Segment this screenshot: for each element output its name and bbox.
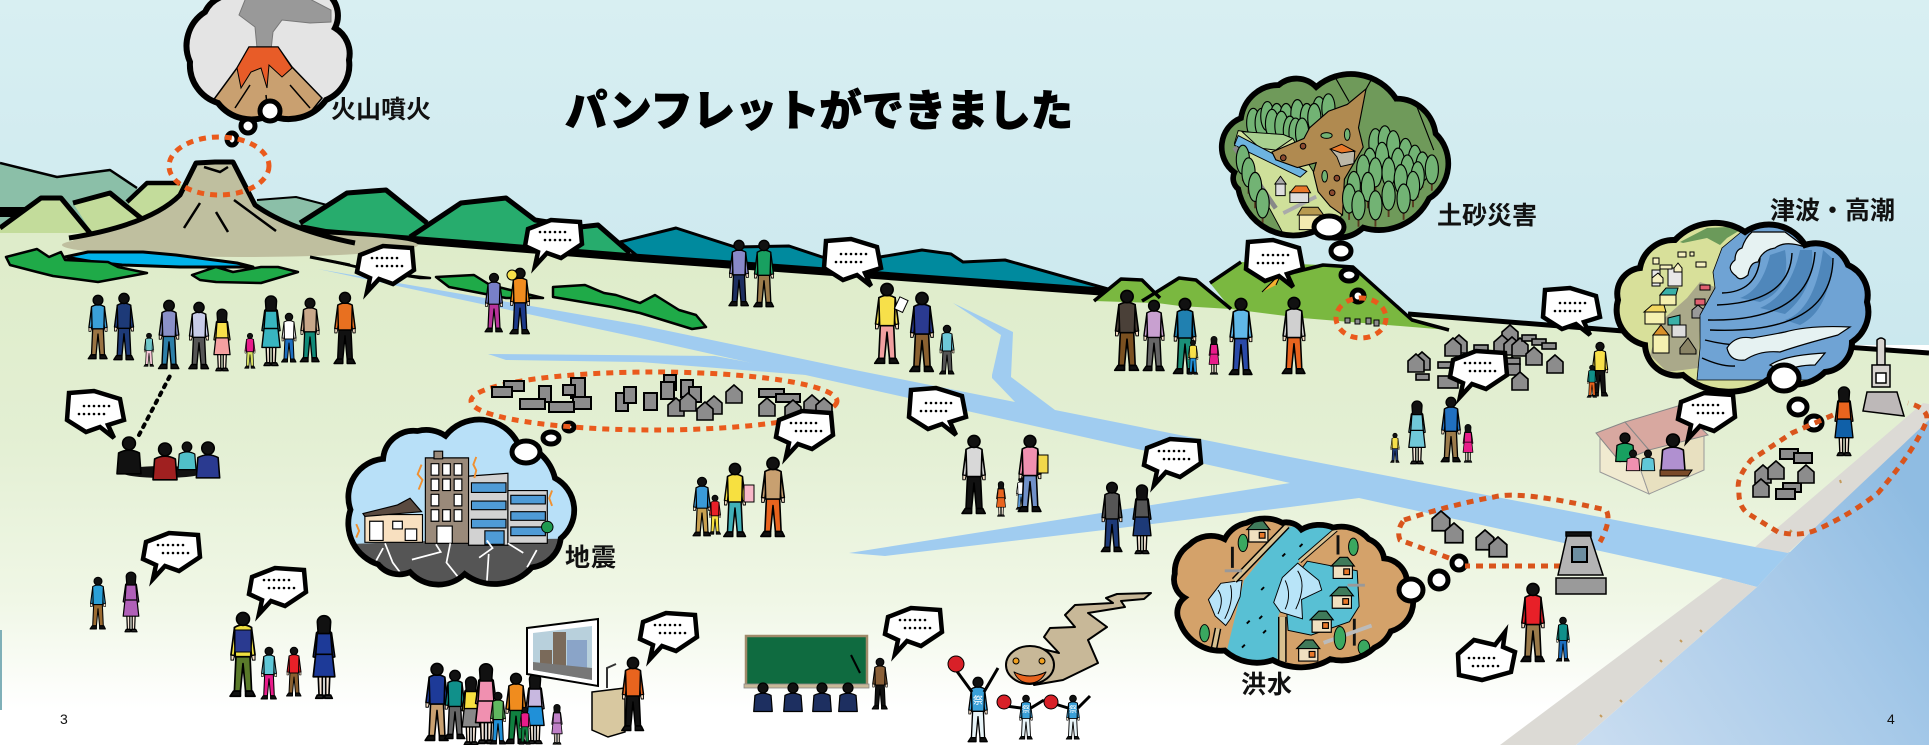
title: パンフレットができました (565, 87, 1073, 136)
coastal houses (1753, 449, 1814, 499)
festival children (948, 656, 1090, 742)
sea (1576, 416, 1929, 745)
festival children: 祭 (1069, 704, 1077, 714)
people: family at centre (962, 435, 1048, 516)
thought cloud: volcano (187, 0, 350, 125)
people: walking children (90, 572, 139, 632)
people: pregnant woman family (1390, 397, 1473, 464)
thought cloud: landslide (1222, 74, 1448, 238)
people: man with child pointing (1587, 342, 1608, 397)
monument: coast (1863, 338, 1904, 416)
festival children: 祭 (973, 694, 983, 707)
person: hooded woman (1835, 387, 1853, 456)
people: couple near river (485, 268, 529, 334)
festival children: 祭 (1022, 704, 1030, 714)
lake (65, 252, 253, 267)
volcano (62, 162, 418, 257)
sky background (0, 0, 1929, 345)
people: audience at exhibit (425, 663, 562, 745)
dashed outline: coastal area (1738, 403, 1927, 534)
scattered houses right of landslide (1408, 325, 1563, 390)
label: earthquake: 地震 (565, 544, 616, 572)
people: two men talking (729, 240, 774, 307)
thought cloud: flood (1174, 518, 1413, 667)
exhibit picture board (527, 619, 598, 686)
landslide village (1345, 318, 1379, 326)
monument: flood (1556, 532, 1606, 594)
flood area houses (1432, 511, 1507, 557)
label: landslide: 土砂災害 (1437, 202, 1537, 230)
people: volcano viewing group (88, 292, 355, 371)
forest patches (6, 249, 706, 329)
green mountains (300, 190, 630, 253)
river side branch (488, 354, 806, 375)
right green hills (1094, 262, 1449, 330)
speech bubbles (67, 220, 1735, 680)
teal mountains (620, 228, 1108, 289)
shelter hut with storyteller (1596, 406, 1708, 494)
blackboard (744, 636, 869, 688)
town blocks in ellipse (492, 375, 832, 420)
horizon line (300, 228, 1108, 292)
thought bubbles: earthquake (512, 423, 574, 463)
label: tsunami and storm surge: 津波・高潮 (1770, 197, 1895, 225)
dashed outline: flood area (1399, 495, 1608, 566)
thought bubbles: landslide (1314, 216, 1364, 302)
people: family with guidebook (875, 283, 954, 374)
dashed ellipse: town (471, 372, 837, 430)
thought cloud: earthquake (345, 419, 575, 596)
thought cloud: tsunami (1617, 215, 1875, 392)
right horizon line (1408, 314, 1929, 353)
people: students in uniform (1101, 482, 1151, 554)
thought bubbles: tsunami (1769, 365, 1822, 430)
far left mountains (0, 163, 327, 235)
page number 4: 4 (1887, 711, 1895, 727)
people: family from behind (230, 612, 335, 699)
thought bubbles: volcano (227, 101, 280, 145)
dashed circle: landslide (1336, 298, 1386, 338)
dotted line to meeting group (139, 372, 172, 435)
page number 3: 3 (60, 711, 68, 727)
beach (1500, 403, 1929, 745)
students and teacher (754, 655, 887, 712)
catfish mascot (1006, 593, 1151, 685)
ground background (0, 228, 1929, 745)
people: group below landslide (1115, 272, 1305, 374)
podium and presenter (592, 657, 644, 737)
label: flood: 洪水 (1241, 671, 1292, 699)
river (318, 269, 1790, 587)
people: woman and child near monument (1521, 583, 1569, 661)
people: meeting table (117, 437, 220, 480)
thought bubbles: flood (1399, 556, 1466, 601)
label: volcanic eruption: 火山噴火 (331, 96, 431, 124)
dashed ellipse: volcano (169, 137, 269, 195)
people: family under town (693, 457, 784, 536)
